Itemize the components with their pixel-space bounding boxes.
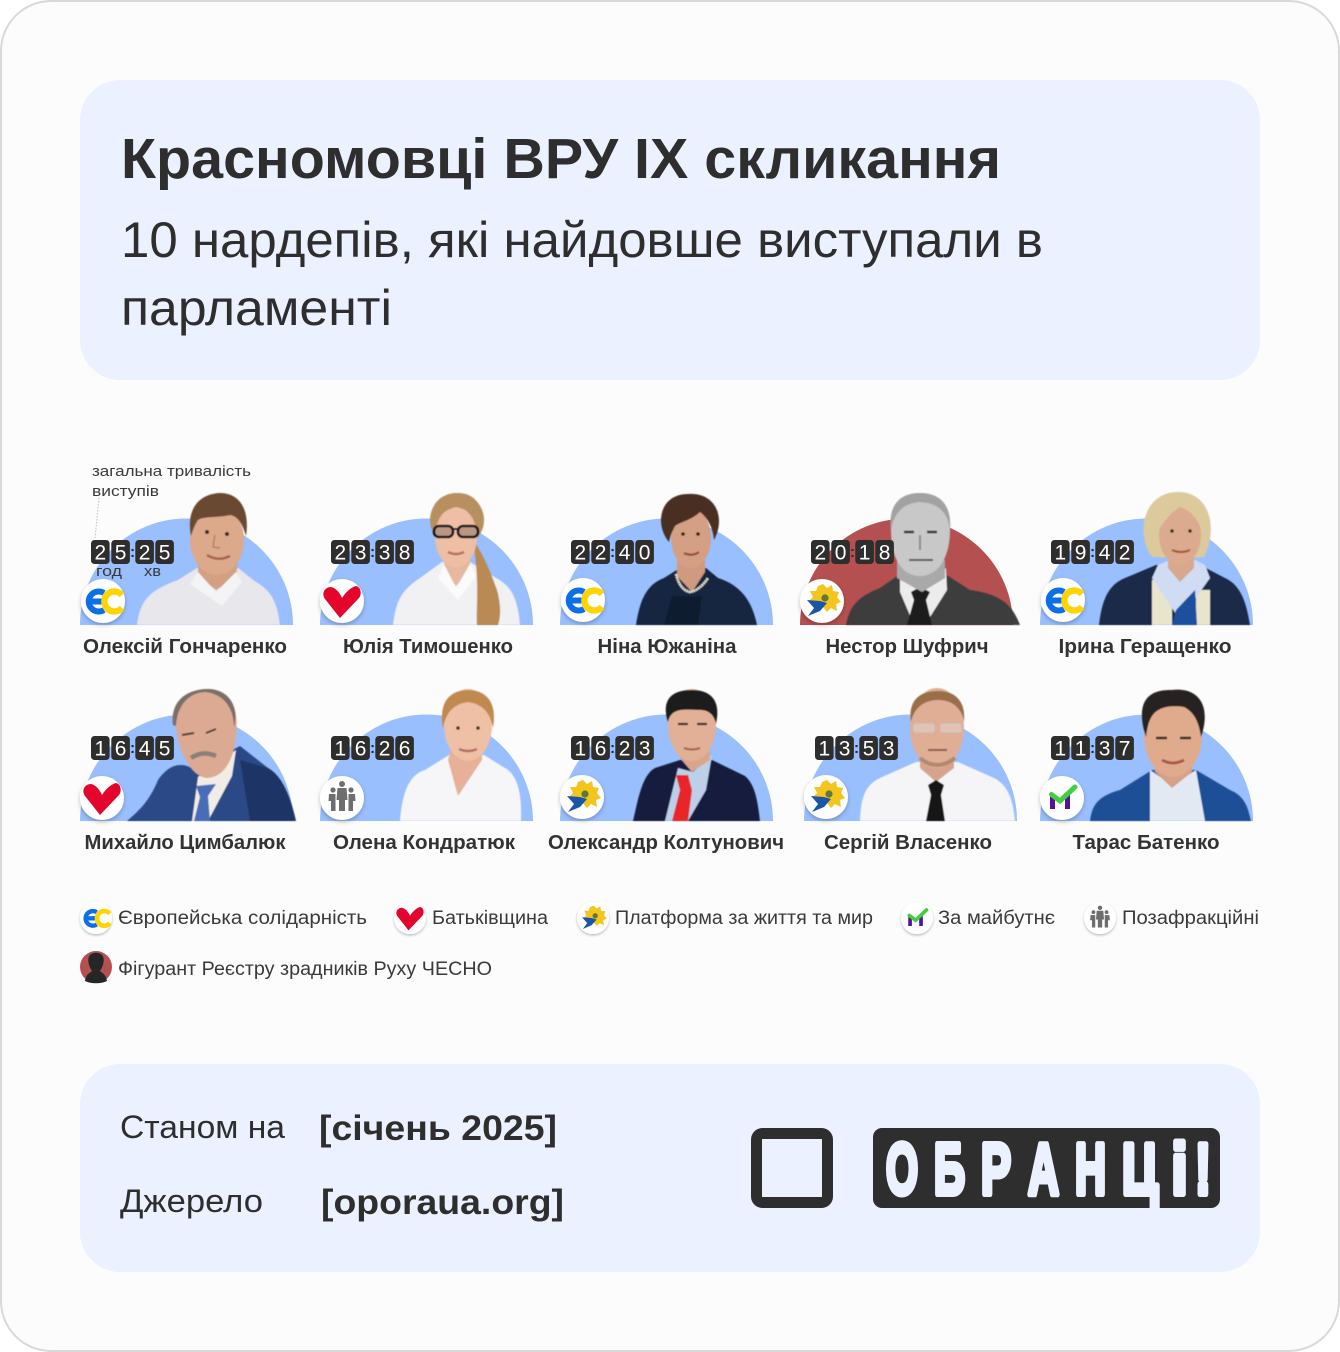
counter: 8	[879, 542, 890, 564]
name: Ніна Южаніна	[598, 636, 737, 658]
counter: 1	[334, 738, 346, 760]
counter: 5	[863, 738, 874, 760]
portrait	[393, 493, 520, 625]
name: Олексій Гончаренко	[83, 636, 287, 658]
panel: footer	[80, 1064, 1260, 1272]
counter: 3	[883, 738, 894, 760]
counter: 1	[859, 542, 870, 564]
counter: 5	[115, 542, 126, 564]
date line	[120, 1109, 557, 1148]
counter: 1	[818, 738, 830, 760]
name: Тарас Батенко	[1072, 832, 1220, 854]
counter: :	[610, 740, 615, 757]
logo: ОБРАНЦІ wordmark: Ц	[1122, 1130, 1158, 1210]
counter: 2	[139, 542, 150, 564]
counter: 2	[334, 542, 346, 564]
legend item: Фігурант Реєстру зрадників: Фігурант Реєстру зрадників Руху ЧЕСНО	[118, 959, 492, 980]
counter	[91, 540, 174, 580]
badge	[80, 776, 124, 820]
counter: год	[96, 564, 123, 580]
badge	[1040, 776, 1084, 820]
counter	[1051, 736, 1134, 760]
card: Олена Кондратюк	[320, 689, 533, 854]
name: Сергій Власенко	[824, 832, 992, 854]
counter	[811, 540, 894, 564]
legend item: Батьківщина	[394, 902, 548, 934]
name: Михайло Цимбалюк	[84, 832, 286, 854]
logo: ОБРАНЦІ wordmark: Н	[1075, 1130, 1106, 1210]
legend	[80, 902, 1259, 983]
portrait	[127, 689, 296, 821]
counter: 3	[839, 738, 850, 760]
subtitle: парламенті	[121, 280, 392, 336]
counter: 3	[379, 542, 390, 564]
counter: 2	[1119, 542, 1130, 564]
logo: ОБРАНЦІ wordmark: Б	[934, 1130, 965, 1210]
logo: ОБРАНЦІ wordmark: і	[1172, 1130, 1188, 1210]
badge	[1041, 578, 1085, 622]
counter: 4	[619, 542, 631, 564]
card: Тарас Батенко	[1040, 690, 1253, 854]
badge	[800, 579, 844, 623]
name: Олена Кондратюк	[333, 832, 516, 854]
card: Ірина Геращенко	[1040, 492, 1253, 658]
source line: [oporaua.org]	[321, 1183, 564, 1222]
counter: 8	[399, 542, 410, 564]
badge	[561, 578, 605, 622]
counter	[571, 540, 654, 564]
subtitle: 10 нардепів, які найдовше виступали в	[121, 212, 1043, 268]
logo: ОБРАНЦІ wordmark: Р	[981, 1130, 1011, 1210]
card: Нестор Шуфрич	[800, 493, 1020, 658]
legend item: За майбутнє: За майбутнє	[938, 908, 1055, 929]
counter: :	[130, 544, 135, 561]
counter: 1	[94, 738, 106, 760]
card: Михайло Цимбалюк	[80, 689, 296, 854]
counter: 3	[1099, 738, 1110, 760]
counter: 1	[1075, 738, 1086, 760]
counter: :	[370, 544, 375, 561]
badge	[320, 579, 364, 623]
badge	[804, 775, 848, 819]
annotation: total speech duration: виступів	[92, 484, 159, 500]
counter: 4	[1099, 542, 1111, 564]
logo: ОБРАНЦІ wordmark	[873, 1128, 1220, 1210]
counter: :	[1090, 544, 1095, 561]
card: Олександр Колтунович	[548, 689, 784, 854]
logo: ОБРАНЦІ wordmark: О	[886, 1130, 918, 1210]
annotation: total speech duration: загальна тривалість	[92, 464, 251, 480]
counter: 1	[1054, 542, 1066, 564]
portrait	[633, 689, 760, 821]
counter: :	[854, 740, 859, 757]
counter: 7	[1119, 738, 1130, 760]
counter: 2	[619, 738, 630, 760]
counter: 6	[355, 738, 366, 760]
logo: ОБРАНЦІ wordmark: !	[1195, 1130, 1211, 1210]
counter: :	[850, 544, 855, 561]
counter: 1	[1054, 738, 1066, 760]
counter: :	[370, 740, 375, 757]
legend item: Позафракційні	[1084, 902, 1259, 934]
annotation: total speech duration	[92, 464, 251, 538]
portrait	[1090, 690, 1251, 821]
card: Ніна Южаніна	[560, 494, 773, 658]
card: Сергій Власенко	[804, 688, 1017, 854]
counter: 2	[814, 542, 826, 564]
counter: 4	[139, 738, 151, 760]
source line: Джерело	[120, 1183, 263, 1219]
source line	[120, 1183, 564, 1222]
counter: 6	[399, 738, 410, 760]
logo: square mark	[756, 1134, 828, 1202]
legend item: Фігурант Реєстру зрадників	[80, 951, 492, 983]
card: Юлія Тимошенко	[320, 493, 533, 658]
logo: ОБРАНЦІ wordmark: А	[1028, 1130, 1059, 1210]
counter	[331, 540, 414, 564]
counter: 0	[835, 542, 846, 564]
title: Красномовці ВРУ ІХ скликання	[121, 127, 1001, 191]
name: Юлія Тимошенко	[343, 636, 513, 658]
counter: 6	[115, 738, 126, 760]
legend item: Європейська солідарність	[80, 902, 367, 934]
portrait	[636, 494, 757, 625]
counter	[331, 736, 414, 760]
counter	[815, 736, 898, 760]
name: Ірина Геращенко	[1058, 636, 1232, 658]
counter: 1	[574, 738, 586, 760]
panel: header	[80, 80, 1260, 380]
portrait	[1099, 492, 1250, 625]
legend item: Європейська солідарність: Європейська солідарність	[118, 908, 367, 929]
portrait	[860, 688, 1015, 821]
legend item: Платформа за життя та мир	[577, 902, 873, 934]
counter	[571, 736, 654, 760]
counter	[91, 736, 174, 760]
legend item: Батьківщина: Батьківщина	[432, 908, 548, 929]
counter: 3	[355, 542, 366, 564]
legend item: Платформа за життя та мир: Платформа за життя та мир	[615, 908, 873, 929]
counter: 2	[574, 542, 586, 564]
counter: хв	[144, 564, 161, 580]
card: Олексій Гончаренко	[80, 493, 293, 658]
counter: 0	[639, 542, 650, 564]
date line: [січень 2025]	[319, 1109, 557, 1148]
counter	[1051, 540, 1134, 564]
counter: 2	[379, 738, 390, 760]
counter: 6	[595, 738, 606, 760]
counter: :	[1090, 740, 1095, 757]
name: Олександр Колтунович	[548, 832, 784, 854]
badge	[81, 579, 125, 623]
badge	[560, 775, 604, 819]
counter: :	[130, 740, 135, 757]
counter: 2	[94, 542, 106, 564]
counter: 9	[1075, 542, 1086, 564]
counter: 5	[159, 542, 170, 564]
portrait	[400, 689, 521, 821]
counter: :	[610, 544, 615, 561]
counter: 2	[595, 542, 606, 564]
counter: 5	[159, 738, 170, 760]
badge	[320, 776, 364, 820]
portrait	[137, 493, 280, 625]
date line: Станом на	[120, 1109, 285, 1145]
counter: 3	[639, 738, 650, 760]
portrait	[846, 493, 1020, 625]
legend item: За майбутнє	[901, 902, 1055, 934]
legend item: Позафракційні: Позафракційні	[1122, 908, 1259, 929]
name: Нестор Шуфрич	[826, 636, 988, 658]
